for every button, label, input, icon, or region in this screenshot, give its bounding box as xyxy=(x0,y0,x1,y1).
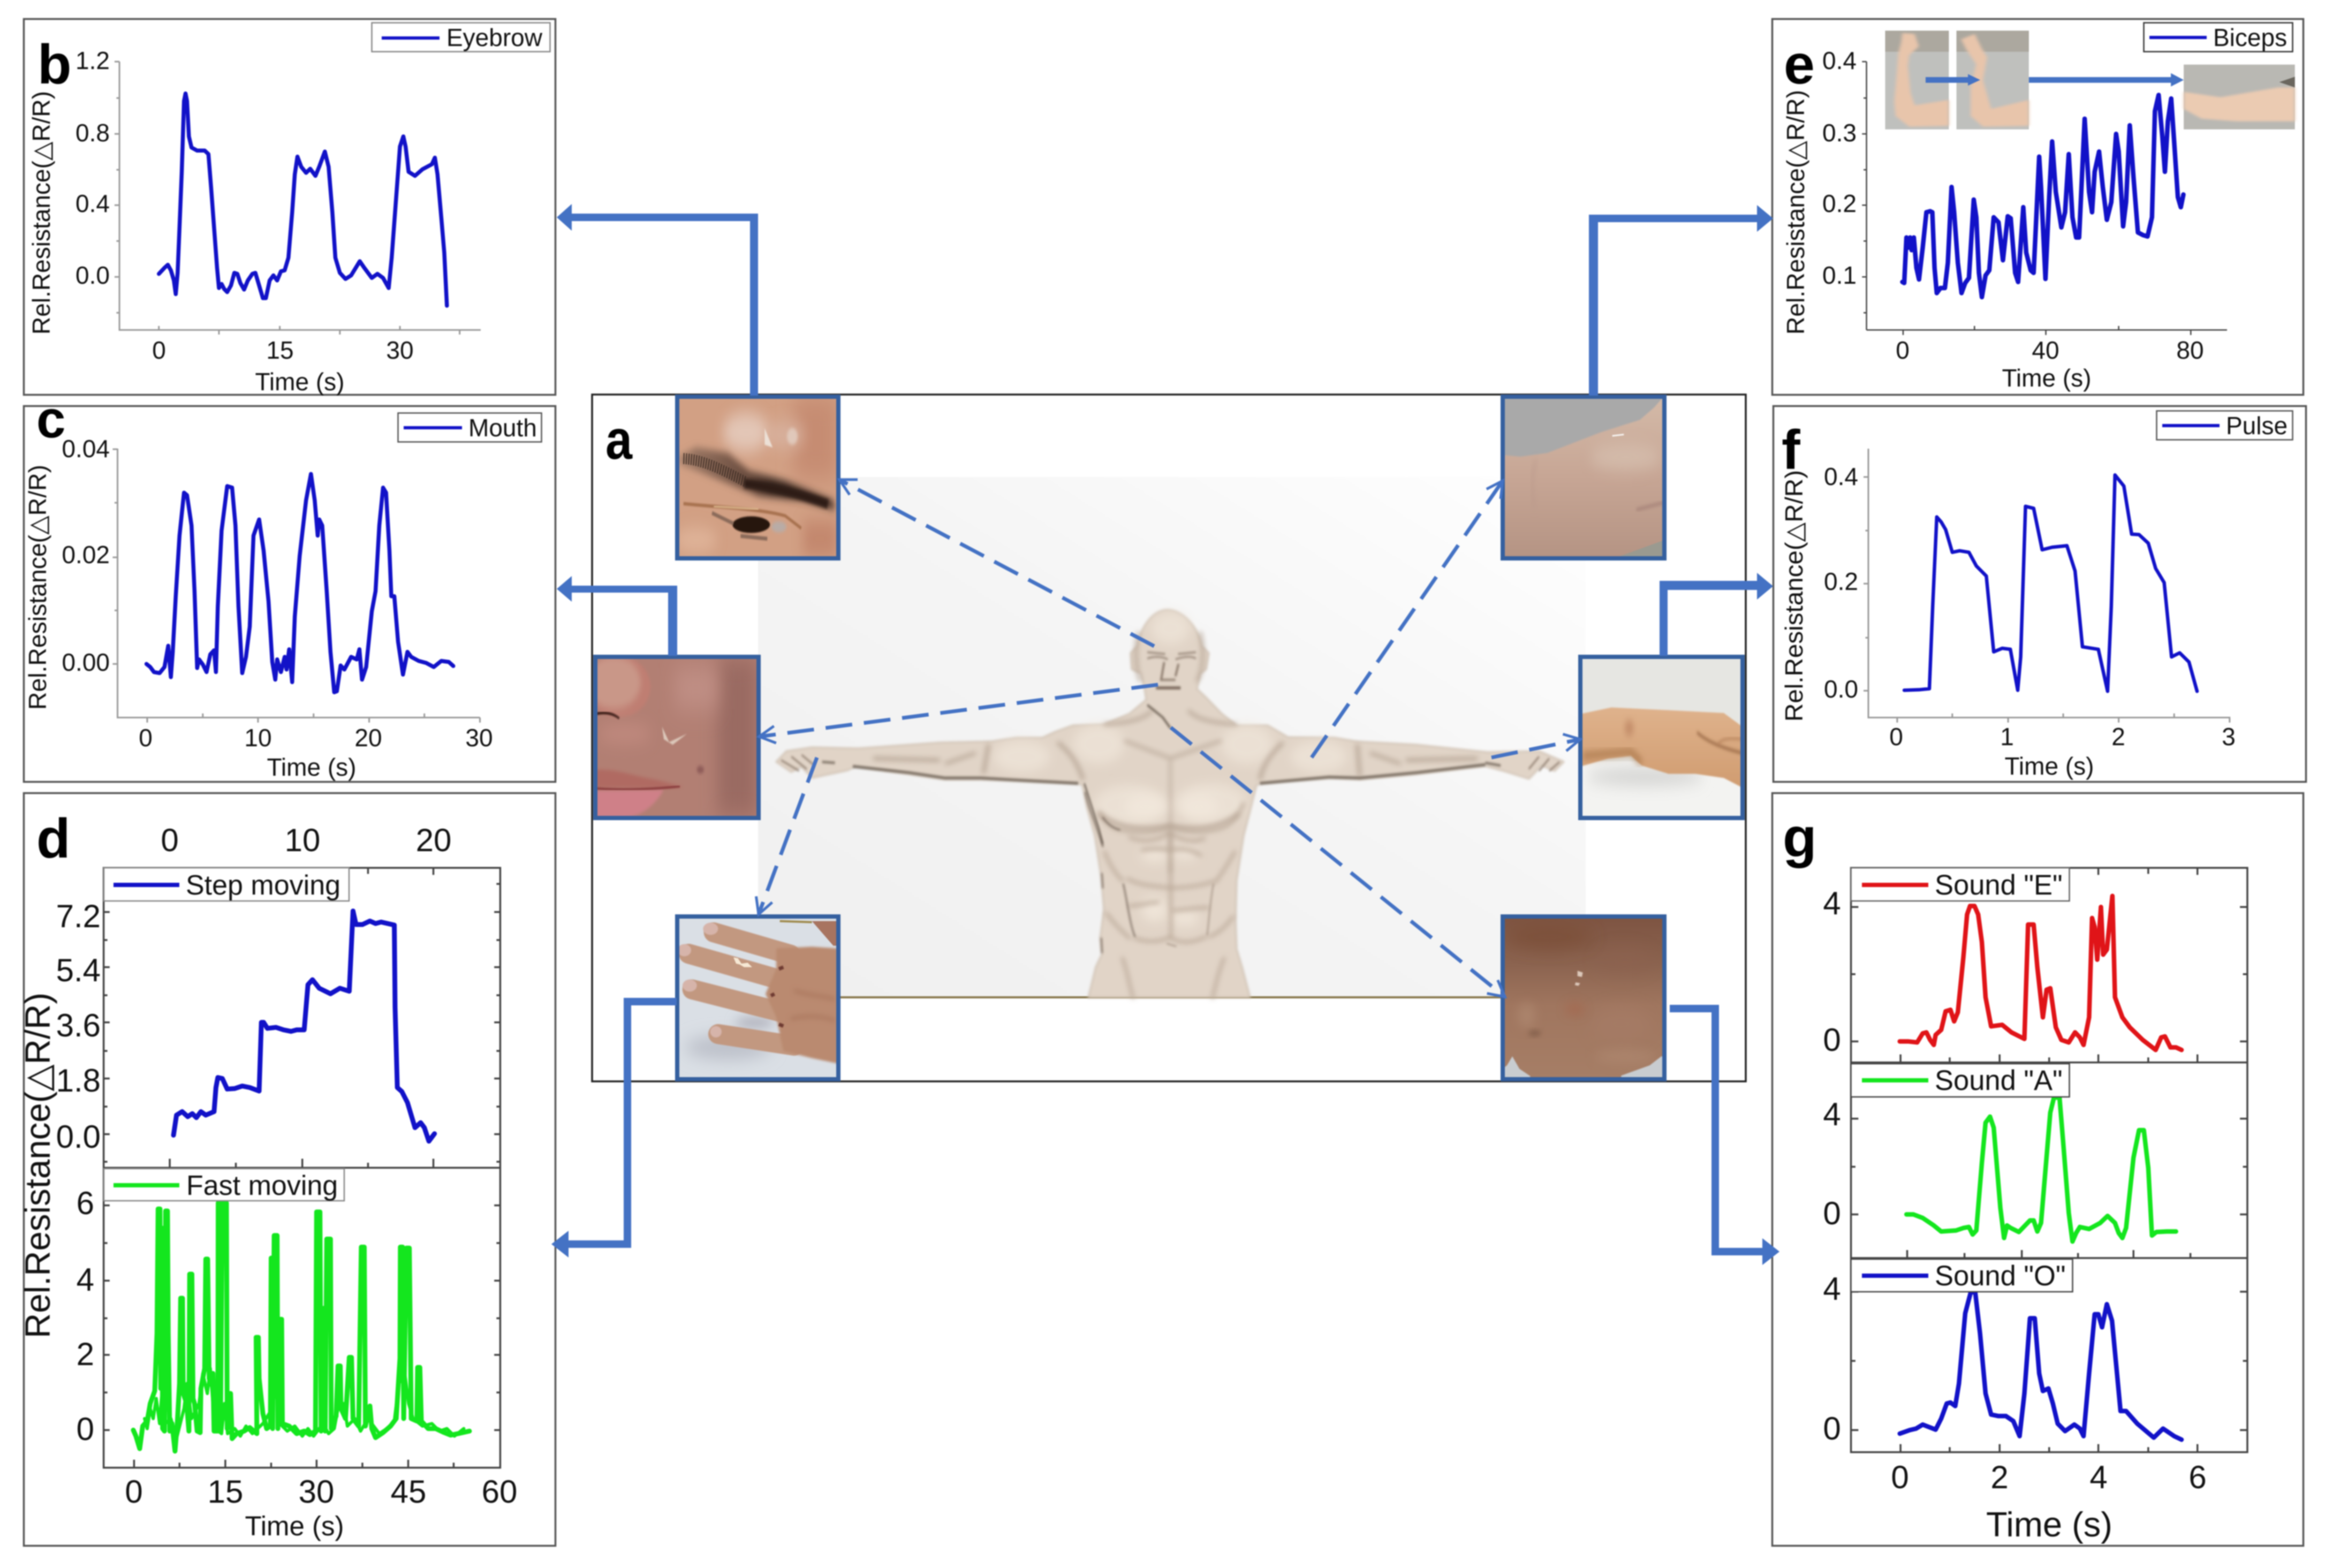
connector arrow to panel c xyxy=(557,576,677,656)
inset photo 2 xyxy=(1957,31,2029,130)
axes d xyxy=(104,868,500,1468)
tick labels b: 0 xyxy=(152,336,166,364)
x axis title g: Time (s) xyxy=(1986,1505,2112,1544)
figure background xyxy=(758,477,1586,997)
legend d: step moving xyxy=(104,868,349,901)
legend g: sound A xyxy=(1851,1064,2070,1097)
tick labels d: 15 xyxy=(208,1474,243,1510)
panel g frame xyxy=(1772,793,2303,1546)
tick labels g: 4 xyxy=(1823,1096,1841,1132)
tick labels d: 60 xyxy=(482,1474,517,1510)
connector arrow to panel b xyxy=(557,204,758,396)
tick labels g xyxy=(1823,885,2207,1495)
curve g: sound O xyxy=(1900,1292,2182,1440)
photo: mouth side xyxy=(587,656,758,818)
tick labels b: 1.2 xyxy=(75,47,110,74)
legend e xyxy=(2144,22,2292,51)
tick labels d: 2 xyxy=(77,1336,94,1372)
tick labels d: 0 xyxy=(77,1411,94,1447)
connector arrow to panel d xyxy=(551,998,677,1258)
inset photo 1 xyxy=(1885,31,1949,130)
tick labels f: 2 xyxy=(2111,723,2125,751)
tick labels c xyxy=(62,435,493,752)
legend d: step moving: Step moving xyxy=(186,870,340,901)
body silhouette xyxy=(776,610,1564,997)
x axis title c: Time (s) xyxy=(267,753,356,781)
tick labels g: 4 xyxy=(1823,885,1841,921)
x axis title b: Time (s) xyxy=(255,368,344,396)
y axis title e: Rel.Resistance(△R/R) xyxy=(1782,90,1809,335)
tick labels e: 0.4 xyxy=(1822,47,1857,74)
tick labels c: 0.02 xyxy=(62,541,110,569)
legend g: sound E: Sound "E" xyxy=(1935,869,2063,901)
legend c: Mouth xyxy=(468,414,537,442)
tick labels d: 1.8 xyxy=(56,1063,101,1099)
connector arrow to panel e xyxy=(1589,205,1773,396)
tick labels e: 0.1 xyxy=(1822,261,1857,289)
tick labels c: 30 xyxy=(465,724,493,752)
label e: e xyxy=(1784,34,1815,96)
connector arrow to panel g xyxy=(1670,1005,1779,1265)
tick labels g: 0 xyxy=(1891,1459,1909,1495)
legend b xyxy=(372,22,550,51)
tick labels g: 0 xyxy=(1823,1411,1841,1446)
label g: g xyxy=(1783,807,1817,869)
body shading: head, arms and chest xyxy=(781,612,1559,873)
human figure xyxy=(776,610,1564,998)
tick labels c: 10 xyxy=(244,724,272,752)
legend g: sound O xyxy=(1851,1259,2073,1292)
photo frames xyxy=(595,397,1743,1079)
tick labels c: 0.04 xyxy=(62,435,110,463)
inset arrow 1 xyxy=(1926,74,1980,86)
label a: a xyxy=(605,409,633,471)
tick labels d: 10 xyxy=(285,822,320,858)
figure base line xyxy=(838,996,1503,998)
legend g: sound A: Sound "A" xyxy=(1935,1065,2063,1096)
tick labels d: 0 xyxy=(161,822,179,858)
tick labels g: 2 xyxy=(1990,1459,2009,1495)
tick labels g: 4 xyxy=(1823,1271,1841,1307)
legend c xyxy=(398,413,542,442)
label f: f xyxy=(1782,419,1800,481)
curve d: fast moving xyxy=(133,1203,469,1451)
legend e: Biceps xyxy=(2213,24,2287,51)
panel b frame xyxy=(24,19,556,395)
tick labels d: 45 xyxy=(391,1474,426,1510)
legend f: Pulse xyxy=(2226,412,2288,440)
label c: c xyxy=(36,390,66,449)
x axis title e: Time (s) xyxy=(2002,364,2091,392)
tick labels d: 20 xyxy=(416,822,451,858)
tick labels e: 0 xyxy=(1896,336,1910,364)
curve b xyxy=(159,94,447,306)
tick labels f: 0.4 xyxy=(1824,463,1858,490)
tick labels d: 7.2 xyxy=(56,898,101,934)
y axis title d: Rel.Resistance(△R/R) xyxy=(18,993,57,1338)
curve e xyxy=(1903,95,2183,297)
photo: abdomen xyxy=(1503,917,1665,1078)
panel f: pulse chart xyxy=(1773,406,2306,782)
tick labels b: 30 xyxy=(386,336,414,364)
axes e xyxy=(1862,62,2227,335)
panel e frame xyxy=(1772,19,2303,395)
tick labels d: 0.0 xyxy=(56,1119,101,1155)
tick labels b: 0.0 xyxy=(75,261,110,289)
y axis title f: Rel.Resistance(△R/R) xyxy=(1780,470,1808,722)
tick labels e: 40 xyxy=(2032,336,2059,364)
panel f frame xyxy=(1773,406,2306,782)
tick labels c: 0.00 xyxy=(62,648,110,676)
inset photo 3 xyxy=(2184,65,2295,130)
tick labels g: 0 xyxy=(1823,1022,1841,1058)
curve d: step moving xyxy=(173,911,435,1141)
legend b: Eyebrow xyxy=(446,24,543,51)
tick labels b: 0.4 xyxy=(75,190,110,217)
curve f xyxy=(1904,475,2197,691)
tick labels f: 0.0 xyxy=(1824,675,1858,703)
panel d: step and fast moving chart xyxy=(18,793,556,1546)
panel b: eyebrow chart xyxy=(24,19,556,396)
tick labels d xyxy=(56,822,517,1510)
tick labels d: 6 xyxy=(77,1185,94,1221)
x axis title d: Time (s) xyxy=(245,1511,344,1541)
axes g xyxy=(1851,868,2247,1452)
tick labels e: 80 xyxy=(2176,336,2204,364)
y axis title c: Rel.Resistance(△R/R) xyxy=(24,465,51,710)
panel e: biceps chart xyxy=(1772,19,2303,395)
connector arrow to panel f xyxy=(1660,573,1773,656)
photo: biceps xyxy=(1503,396,1664,557)
tick labels b: 0.8 xyxy=(75,119,110,147)
legend d: fast moving: Fast moving xyxy=(186,1170,338,1201)
tick labels g: 6 xyxy=(2188,1459,2207,1495)
curve g: sound E xyxy=(1900,896,2182,1050)
tick labels c: 20 xyxy=(354,724,382,752)
photo: wrist xyxy=(1581,658,1743,817)
curve g: sound A xyxy=(1906,1097,2176,1241)
tick labels d: 5.4 xyxy=(56,952,101,988)
tick labels f: 0.2 xyxy=(1824,567,1858,595)
legend f xyxy=(2156,411,2292,440)
tick labels e xyxy=(1822,47,2204,364)
tick labels b: 15 xyxy=(266,336,294,364)
panel c frame xyxy=(24,406,556,782)
legend g: sound E xyxy=(1851,868,2070,901)
tick labels f xyxy=(1824,463,2236,751)
panel a frame xyxy=(592,395,1746,1081)
tick labels g: 4 xyxy=(2089,1459,2108,1495)
panel d frame xyxy=(24,793,556,1546)
axes c xyxy=(112,449,480,723)
tick labels d: 30 xyxy=(299,1474,334,1510)
body shading: abdomen xyxy=(1085,792,1244,998)
label d: d xyxy=(36,808,71,870)
tick labels d: 3.6 xyxy=(56,1008,101,1043)
tick labels d: 4 xyxy=(77,1262,94,1298)
inset arrow 2 xyxy=(2029,73,2184,87)
axes f xyxy=(1864,449,2230,723)
label b: b xyxy=(37,34,72,96)
dashed location arrows xyxy=(759,480,1580,997)
photo: hand xyxy=(676,917,838,1078)
curve c xyxy=(147,474,453,692)
legend d: fast moving xyxy=(104,1169,344,1201)
tick labels c: 0 xyxy=(139,724,153,752)
tick labels f: 0 xyxy=(1889,723,1903,751)
tick labels e: 0.2 xyxy=(1822,190,1857,217)
inset photos: arm flexing xyxy=(1885,31,2295,130)
tick labels g: 0 xyxy=(1823,1195,1841,1231)
panel c: mouth chart xyxy=(24,390,556,782)
panel g: sound chart xyxy=(1772,793,2303,1546)
tick labels b xyxy=(75,47,414,364)
tick labels f: 3 xyxy=(2222,723,2236,751)
tick labels e: 0.3 xyxy=(1822,119,1857,147)
tick labels f: 1 xyxy=(2000,723,2014,751)
y axis title b: Rel.Resistance(△R/R) xyxy=(27,91,55,335)
axes b xyxy=(115,62,481,335)
panel a: body with sensor locations xyxy=(587,395,1746,1081)
x axis title f: Time (s) xyxy=(2005,752,2094,780)
legend g: sound O: Sound "O" xyxy=(1935,1260,2066,1292)
photo: eyebrow xyxy=(675,396,838,557)
tick labels d: 0 xyxy=(125,1474,143,1510)
